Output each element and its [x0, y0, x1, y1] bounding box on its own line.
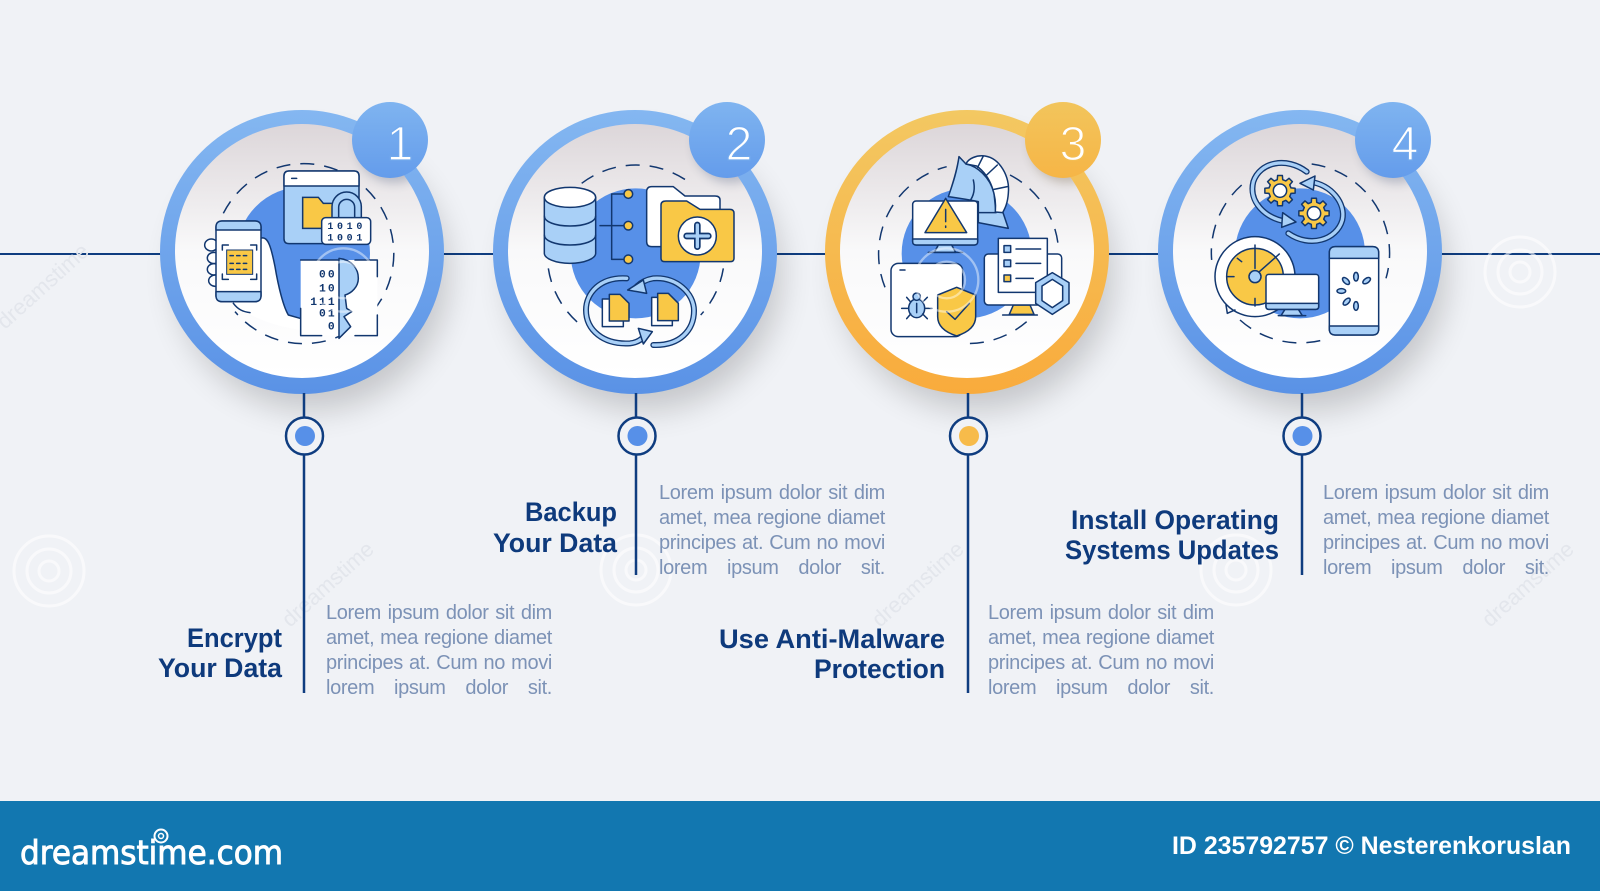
step 3 circle — [825, 102, 1113, 410]
text block: step 1: Lorem ipsum dolor sit dim — [326, 602, 552, 624]
text block: step 4: Lorem ipsum dolor sit dim — [1323, 482, 1549, 504]
icon: encrypted data: 1001 — [327, 233, 366, 244]
text block: step 2: Lorem ipsum dolor sit dim — [659, 482, 885, 504]
text block: step 1: principes at. Cum no movi — [326, 652, 552, 674]
badge 3 — [1025, 102, 1101, 178]
text block: step 1 — [326, 602, 552, 699]
icon: anti-malware — [879, 156, 1069, 344]
heading: Backup Your Data: Your Data — [493, 528, 618, 558]
step 2 circle — [493, 102, 781, 410]
icon: encrypted data: 00 — [319, 270, 337, 282]
heading: Backup Your Data — [493, 497, 618, 558]
horizontal timeline — [0, 253, 1600, 255]
text block: step 3 — [988, 602, 1214, 699]
text block: step 3: Lorem ipsum dolor sit dim — [988, 602, 1214, 624]
heading: Install Operating Systems Updates: Install Operating — [1071, 505, 1279, 535]
number 1: 1 — [387, 118, 413, 171]
icon: encrypted data: 0 — [328, 321, 337, 333]
step 1 circle — [160, 102, 448, 410]
text block: step 1: amet, mea regione diamet — [326, 627, 552, 649]
heading: Encrypt Your Data: Your Data — [158, 653, 283, 683]
heading: Install Operating Systems Updates — [1065, 505, 1279, 565]
watermark: dreamstime — [867, 536, 969, 632]
heading: Use Anti-Malware Protection: Protection — [814, 654, 945, 684]
badge 4 — [1355, 102, 1431, 178]
heading: Encrypt Your Data: Encrypt — [187, 623, 282, 653]
dreamstime logo: dreamstime.com — [20, 833, 283, 872]
badge 1 — [352, 102, 428, 178]
icon: encrypted data: 01 — [319, 309, 337, 321]
connector 3 — [950, 393, 987, 693]
heading: Backup Your Data: Backup — [525, 497, 617, 527]
text block: step 2: lorem ipsum dolor sit. — [659, 557, 885, 579]
watermark: dreamstime — [277, 536, 379, 632]
icon: encrypted data: 1010 — [327, 221, 366, 232]
connector 1 — [286, 393, 323, 693]
icon: encrypted data — [205, 164, 394, 344]
heading: Use Anti-Malware Protection — [719, 624, 945, 684]
text block: step 4: amet, mea regione diamet — [1323, 507, 1549, 529]
text block: step 4: principes at. Cum no movi — [1323, 532, 1549, 554]
heading: Encrypt Your Data — [158, 623, 283, 683]
text block: step 3: lorem ipsum dolor sit. — [988, 677, 1214, 699]
number 2: 2 — [726, 118, 752, 171]
image id and author: ID 235792757 © Nesterenkoruslan — [1172, 832, 1571, 860]
text block: step 2: amet, mea regione diamet — [659, 507, 885, 529]
number 4: 4 — [1392, 118, 1418, 171]
icon: system updates — [1211, 163, 1390, 343]
watermark — [0, 237, 1579, 632]
icon: encrypted data: 111 — [310, 297, 337, 309]
heading: Install Operating Systems Updates: Systems Updates — [1065, 535, 1279, 565]
text block: step 4 — [1323, 482, 1550, 579]
text block: step 2: principes at. Cum no movi — [659, 532, 885, 554]
watermark: dreamstime — [1477, 536, 1579, 632]
heading: Use Anti-Malware Protection: Use Anti-Malware — [719, 624, 945, 654]
text block: step 3: principes at. Cum no movi — [988, 652, 1214, 674]
connector 4 — [1284, 393, 1320, 575]
badge 2 — [689, 102, 765, 178]
text block: step 1: lorem ipsum dolor sit. — [326, 677, 552, 699]
footer banner — [0, 801, 1600, 891]
icon: encrypted data: 10 — [319, 284, 337, 296]
step 4 circle — [1158, 102, 1446, 410]
text block: step 4: lorem ipsum dolor sit. — [1323, 557, 1549, 579]
text block: step 3: amet, mea regione diamet — [988, 627, 1214, 649]
number 3: 3 — [1060, 118, 1086, 171]
text block: step 2 — [659, 482, 886, 579]
connector 2 — [618, 393, 656, 575]
icon: backup — [544, 165, 734, 345]
